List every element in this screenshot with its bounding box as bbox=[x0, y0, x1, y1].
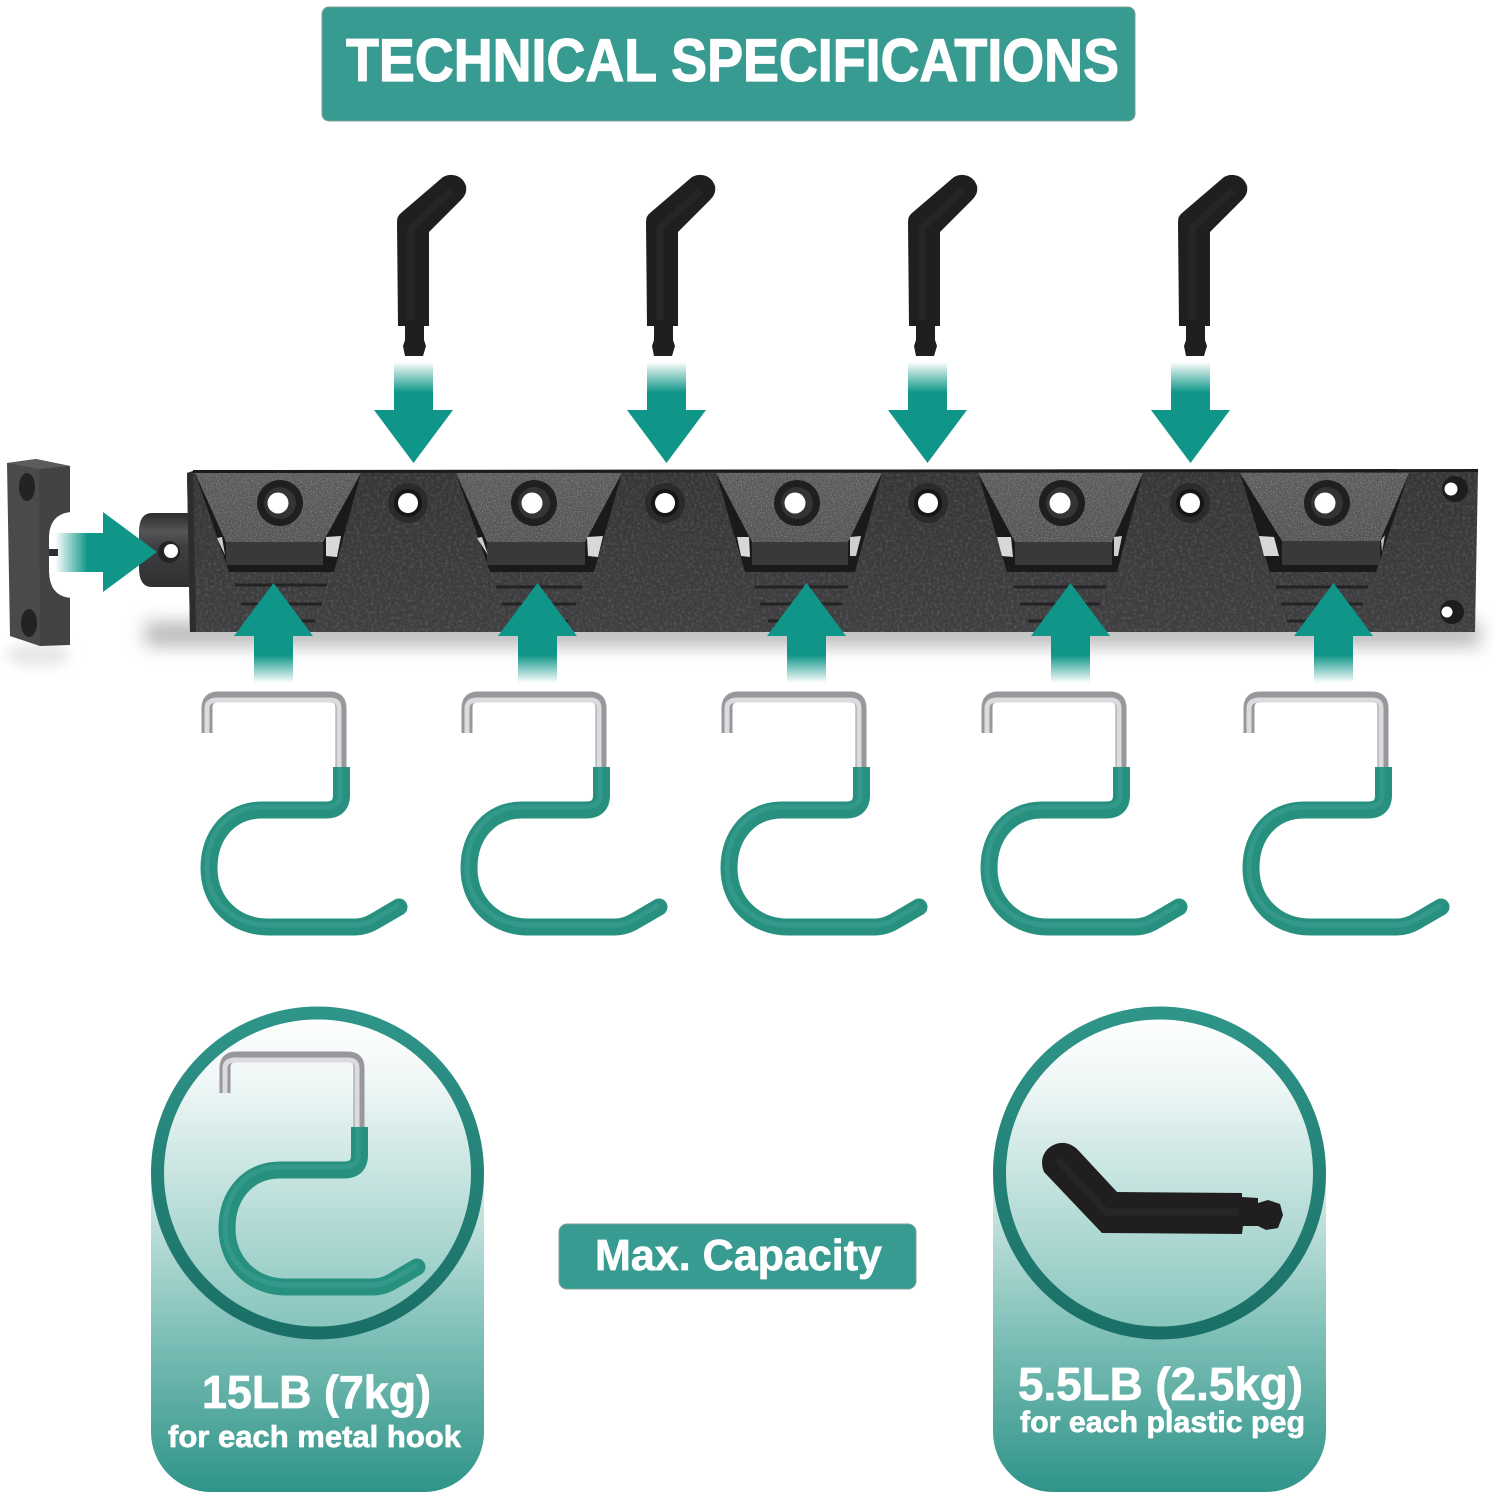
arrow: hook 2 up bbox=[498, 583, 577, 683]
arrow: hook 3 up bbox=[767, 583, 846, 683]
arrow: peg 1 down bbox=[374, 362, 453, 463]
capacity value: 5.5LB (2.5kg) bbox=[1018, 1358, 1303, 1410]
label text: Max. Capacity bbox=[595, 1231, 883, 1280]
slot 2 bbox=[456, 473, 622, 621]
capacity caption: for each plastic peg bbox=[1020, 1406, 1305, 1439]
connector stub bbox=[139, 513, 190, 587]
arrow: hook 5 up bbox=[1294, 583, 1373, 683]
hook 4 bbox=[987, 697, 1188, 927]
badge ring bbox=[158, 1013, 478, 1333]
arrow: peg 2 down bbox=[627, 362, 706, 463]
hook 5 bbox=[1249, 697, 1450, 927]
slot 3 bbox=[716, 473, 882, 621]
title banner bbox=[322, 7, 1135, 121]
slot 4 bbox=[978, 473, 1143, 621]
panel: plastic peg capacity bbox=[993, 1007, 1326, 1492]
rail peg hole 2 bbox=[645, 483, 685, 523]
arrow: bracket right bbox=[55, 512, 157, 592]
peg 3 bbox=[908, 175, 977, 356]
peg 4 bbox=[1178, 175, 1247, 356]
metal hooks row bbox=[207, 697, 1450, 927]
arrows into rail bbox=[55, 362, 1373, 683]
icon: metal hook bbox=[225, 1057, 426, 1287]
corner screw hole bottom bbox=[1440, 600, 1464, 624]
panel: metal hook capacity bbox=[151, 1007, 484, 1492]
title text: TECHNICAL SPECIFICATIONS bbox=[346, 27, 1119, 94]
rail peg hole 4 bbox=[1170, 483, 1210, 523]
mounting rail bbox=[139, 470, 1478, 632]
rail peg hole 3 bbox=[908, 483, 948, 523]
arrow: hook 4 up bbox=[1031, 583, 1110, 683]
max capacity label bbox=[559, 1224, 916, 1289]
capacity value: 15LB (7kg) bbox=[202, 1366, 431, 1418]
icon: plastic peg bbox=[1042, 1143, 1283, 1234]
arrow: peg 4 down bbox=[1151, 362, 1230, 463]
plastic pegs row bbox=[397, 175, 1247, 356]
slot 1 bbox=[195, 473, 361, 621]
rail peg hole 1 bbox=[388, 483, 428, 523]
corner screw hole top bbox=[1442, 476, 1468, 502]
peg 2 bbox=[646, 175, 715, 356]
capacity caption: for each metal hook bbox=[168, 1419, 462, 1454]
wall bracket bbox=[6, 459, 70, 667]
rail shadow bbox=[145, 622, 1480, 646]
hook 1 bbox=[207, 697, 408, 927]
badge ring bbox=[1000, 1013, 1320, 1333]
arrow: hook 1 up bbox=[234, 583, 313, 683]
rail body bbox=[187, 470, 1478, 632]
peg 1 bbox=[397, 175, 466, 356]
hook 2 bbox=[467, 697, 668, 927]
hook 3 bbox=[727, 697, 928, 927]
slot 5 bbox=[1240, 473, 1409, 621]
arrow: peg 3 down bbox=[888, 362, 967, 463]
